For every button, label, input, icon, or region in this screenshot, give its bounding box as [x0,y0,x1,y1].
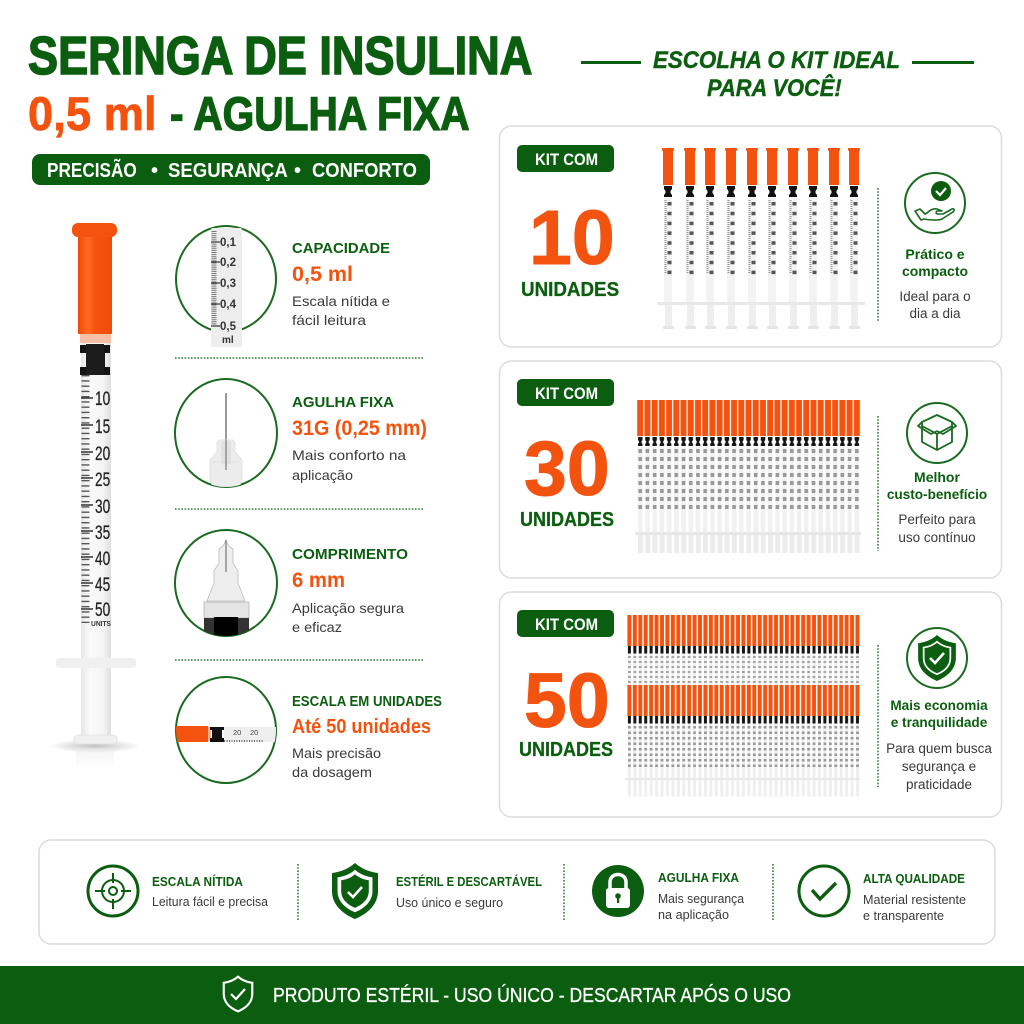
benefit: high quality [863,872,966,923]
main syringe: UNITS [91,621,111,628]
kit 30 quantity: 30 [524,426,610,512]
footer banner: PRODUTO ESTÉRIL - USO ÚNICO - DESCARTAR APÓS O USO [273,984,791,1007]
kit 50 benefit: e tranquilidade [891,715,988,730]
kit 30 benefit [887,469,987,545]
tagline pill: • [294,160,301,182]
kit 50 badge: KIT COM [535,616,598,634]
kit 10 quantity: UNIDADES [521,278,619,301]
benefit: high quality: e transparente [863,909,944,923]
feature: length: COMPRIMENTO [292,546,408,563]
kit 30 badge: KIT COM [535,385,598,403]
kit 30 badge [517,379,614,406]
kit 50 benefit: segurança e [902,759,976,774]
heading: choose your kit: PARA VOCÊ! [707,74,842,101]
icon: footer shield [224,977,252,1011]
feature: fixed needle: 31G (0,25 mm) [292,417,427,440]
kit 50 benefit: Mais economia [890,698,988,713]
main syringe: 15 [95,416,110,438]
kit 30 benefit: uso contínuo [898,530,976,545]
icon: lock [592,865,644,917]
panel: kit of 10 [500,126,1002,347]
fifty syringes [625,615,860,797]
benefit: high quality: Material resistente [863,893,966,907]
benefit: high quality: ALTA QUALIDADE [863,872,965,886]
detail circle: hub [175,530,277,638]
icon: check circle [799,866,849,916]
feature: capacity: 0,5 ml [292,263,353,286]
feature: fixed needle [175,379,427,487]
detail circle: volume scale: ml [222,335,234,346]
icon: target [88,866,138,916]
kit 30 benefit: custo-benefício [887,487,987,502]
main syringe: 50 [95,599,110,621]
kit 50 quantity: UNIDADES [519,739,613,761]
title: 0,5 ml [28,87,157,140]
feature: length: e eficaz [292,619,342,635]
benefit: clear scale [152,874,268,909]
panel: kit of 30 [500,361,1002,578]
feature: unit scale: Mais precisão [292,745,381,761]
main syringe [49,223,141,770]
main syringe: 20 [95,443,110,465]
thirty syringes [635,400,861,554]
icon: shield [332,863,378,919]
tagline pill: PRECISÃO [47,159,137,181]
feature: capacity: Escala nítida e [292,293,390,309]
detail circle: unit markings [176,677,276,783]
detail circle: volume scale: 0,3 [220,278,236,290]
kit 10 badge: KIT COM [535,151,598,169]
tagline pill: CONFORTO [312,160,417,182]
kit 10 benefit [899,246,971,321]
kit 30 benefit: Melhor [914,469,960,485]
benefit: sterile [396,874,542,910]
kit 30 benefit: Perfeito para [898,512,976,527]
kit 50 benefit [886,698,992,792]
feature: length: Aplicação segura [292,600,404,616]
panel: kit of 50 [500,592,1002,817]
detail circle: volume scale: 0,2 [220,257,236,269]
tagline pill: • [151,160,158,182]
heading: choose your kit: ESCOLHA O KIT IDEAL [653,46,900,73]
benefit: fixed needle: na aplicação [658,908,729,922]
icon: shield in circle [907,628,967,688]
icon: box [907,403,967,463]
kit 10 benefit: Ideal para o [899,289,971,304]
feature: fixed needle: aplicação [292,467,353,483]
main syringe: 45 [95,574,110,596]
kit 10 badge [517,145,614,172]
kit 10 quantity: 10 [529,195,615,281]
benefit: sterile: ESTÉRIL E DESCARTÁVEL [396,874,542,889]
main syringe: 30 [95,496,110,518]
detail circle: unit markings: 20 [233,728,241,737]
detail circle: volume scale: 0,5 [220,321,237,333]
title: - AGULHA FIXA [170,88,470,141]
ten syringes [657,148,865,329]
kit 50 quantity: 50 [524,658,610,744]
kit 10 benefit: Prático e [905,246,965,262]
benefit: fixed needle [658,871,744,922]
feature: capacity: fácil leitura [292,312,366,328]
benefit: clear scale: ESCALA NÍTIDA [152,874,243,889]
panel: benefits strip [39,840,995,944]
tagline pill: SEGURANÇA [168,160,288,182]
benefit: fixed needle: AGULHA FIXA [658,871,739,885]
kit 30 quantity: UNIDADES [520,509,614,531]
title [28,25,532,141]
feature: unit scale: Até 50 unidades [292,716,431,738]
title: SERINGA DE INSULINA [28,25,532,86]
main syringe: 40 [95,548,110,570]
kit 50 badge [517,610,614,637]
feature: capacity [176,226,390,347]
kit 50 benefit: Para quem busca [886,741,992,756]
benefit: sterile: Uso único e seguro [396,896,503,910]
main syringe: 35 [95,522,110,544]
detail circle: volume scale: 0,1 [220,237,237,249]
benefit: fixed needle: Mais segurança [658,892,744,906]
icon: hand with check [905,173,965,233]
kit 50 benefit: praticidade [906,777,972,792]
feature: length: 6 mm [292,569,345,592]
detail circle: volume scale [176,226,276,347]
tagline pill [32,154,430,185]
footer banner [0,966,1024,1024]
feature: fixed needle: AGULHA FIXA [292,394,394,411]
main syringe: 25 [95,469,110,491]
feature: fixed needle: Mais conforto na [292,447,406,463]
kit 10 benefit: dia a dia [909,306,961,321]
heading: choose your kit [581,46,974,101]
kit 10 benefit: compacto [902,263,968,279]
feature: unit scale [176,677,442,783]
feature: capacity: CAPACIDADE [292,240,390,257]
detail circle: volume scale: 0,4 [220,299,237,311]
main syringe: 10 [95,388,110,410]
detail circle: needle [175,379,277,487]
feature: length [175,530,408,638]
feature: unit scale: ESCALA EM UNIDADES [292,694,442,710]
detail circle: unit markings: 20 [250,728,258,737]
benefit: clear scale: Leitura fácil e precisa [152,895,268,909]
feature: unit scale: da dosagem [292,764,372,780]
